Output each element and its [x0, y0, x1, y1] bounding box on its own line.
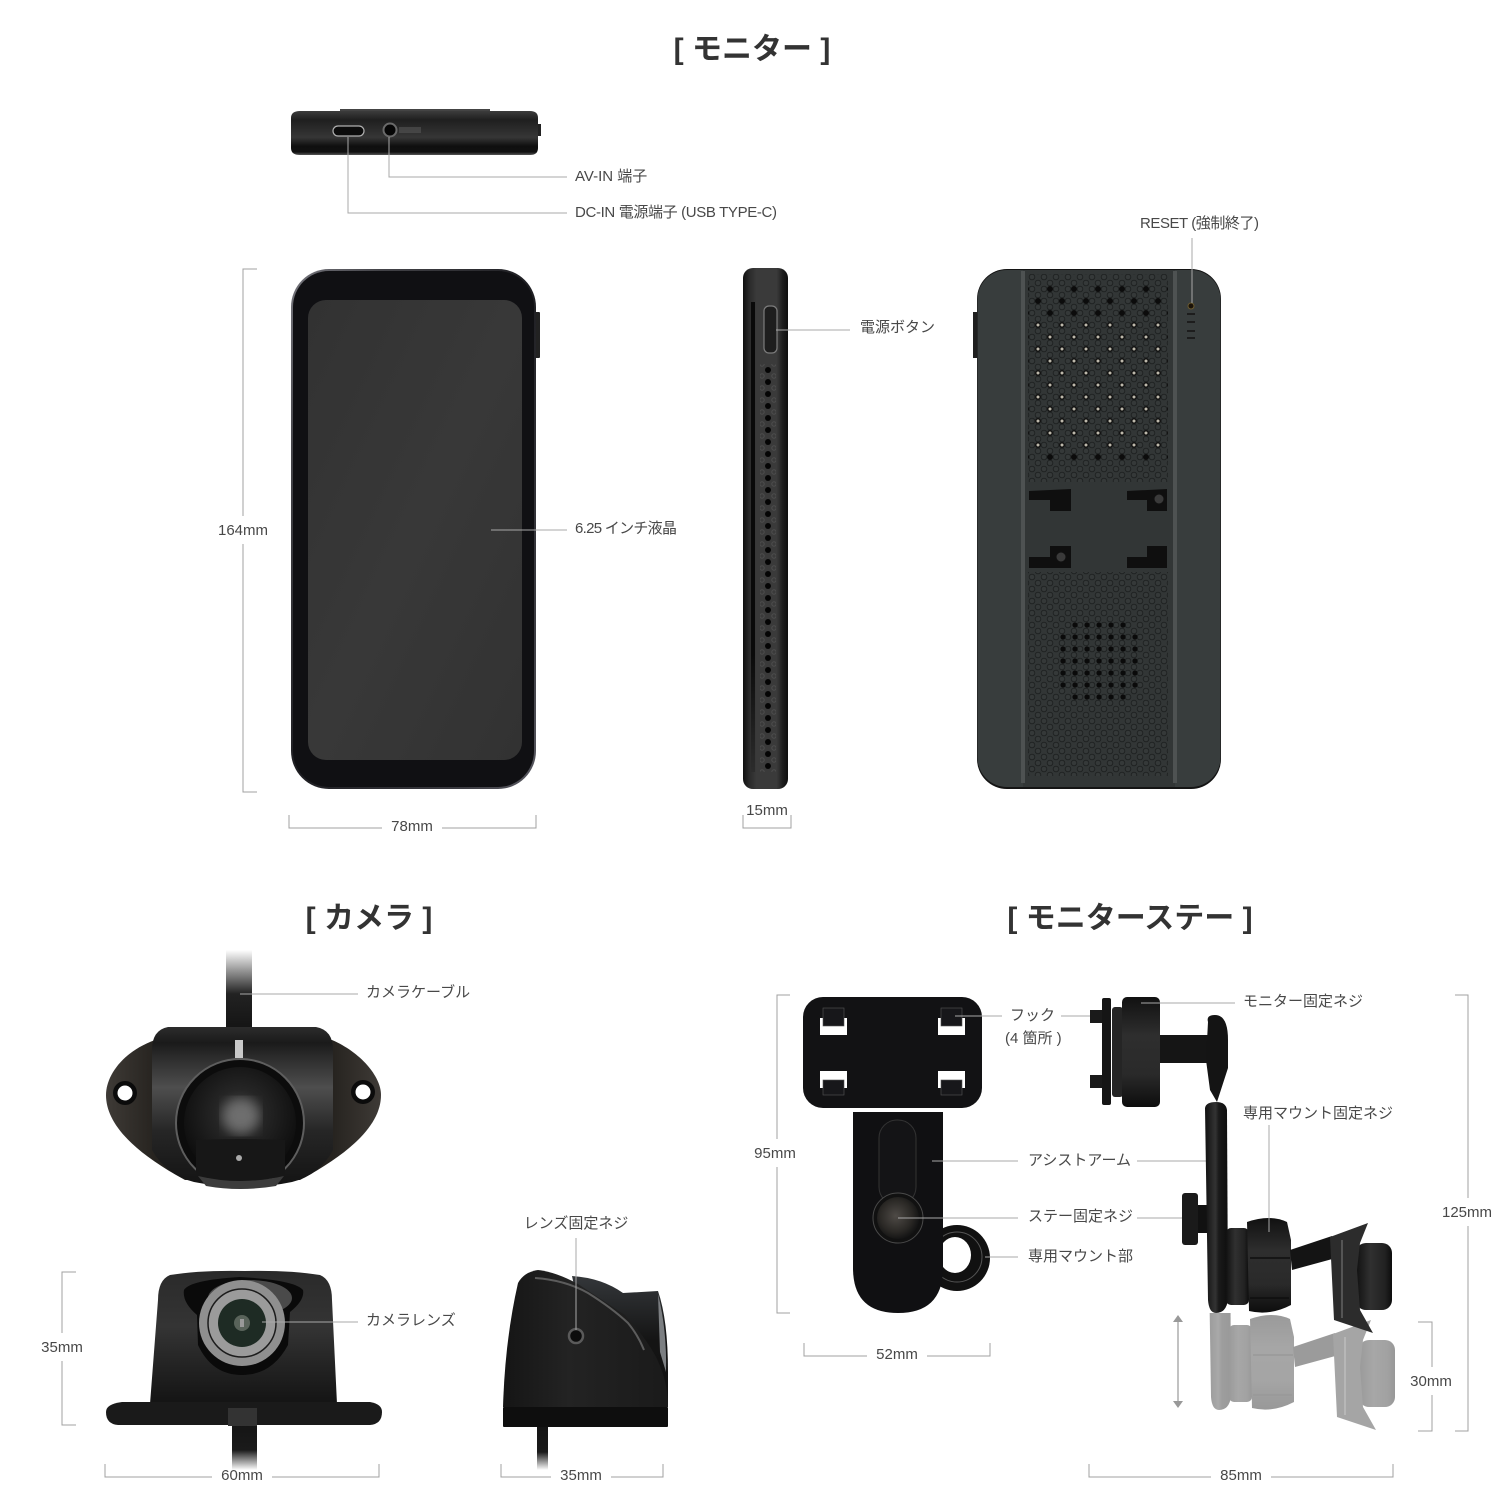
- dimension: 60mm: [105, 1464, 379, 1484]
- dimension: 52mm: [804, 1343, 990, 1363]
- label: camera cable: カメラケーブル: [366, 983, 470, 1001]
- dimension: 35mm width: [501, 1464, 663, 1484]
- leaders: hook right and arm: [898, 1016, 1210, 1257]
- dimension: 35mm height: 35mm: [41, 1339, 83, 1356]
- leader: monitor screw: [1141, 1002, 1235, 1004]
- mounting holes: [113, 1081, 137, 1105]
- stay front view: [803, 997, 990, 1313]
- label: stay screw: ステー固定ネジ: [1028, 1208, 1133, 1225]
- label: assist arm: アシストアーム: [1028, 1152, 1131, 1169]
- camera front view: [106, 1271, 382, 1470]
- dimension: 30mm: [1410, 1322, 1452, 1431]
- ball joint: [176, 1059, 304, 1187]
- dimension: 15mm: 15mm: [746, 802, 788, 819]
- camera side view: [503, 1270, 668, 1470]
- lower speaker grille: [1028, 572, 1168, 776]
- dimension: 30mm: 30mm: [1410, 1373, 1452, 1390]
- upper speaker grille: [1028, 274, 1168, 482]
- monitor side view: [743, 268, 788, 789]
- dimension: 125mm: 125mm: [1442, 1204, 1492, 1221]
- ghost position of lower mount: [1210, 1313, 1395, 1430]
- leader: hook: [955, 1015, 1002, 1017]
- label: lens screw: レンズ固定ネジ: [524, 1215, 628, 1232]
- label: DC-IN: DC-IN 電源端子 (USB TYPE-C): [575, 204, 777, 221]
- lens housing: [572, 1276, 668, 1407]
- label: camera lens: カメラレンズ: [366, 1312, 456, 1329]
- dimension: 60mm: 60mm: [221, 1467, 263, 1484]
- dimension: 78mm: [289, 815, 536, 835]
- hook slots: [820, 1008, 965, 1095]
- label: LCD: 6.25 インチ液晶: [575, 520, 677, 537]
- dimension: 35mm width: 35mm: [560, 1467, 602, 1484]
- leader: camera lens: [262, 1321, 358, 1323]
- icon: lens fixing screw: [569, 1329, 583, 1343]
- leader: AV-IN: [389, 137, 567, 177]
- label: hook: フック: [1010, 1007, 1055, 1024]
- upper head: [1090, 997, 1228, 1107]
- leader: DC-IN: [348, 137, 567, 213]
- power button: [764, 306, 777, 353]
- leader: lens screw: [575, 1238, 577, 1330]
- dimension: 164mm: 164mm: [218, 522, 268, 539]
- leader: reset: [1191, 238, 1193, 303]
- camera top view: [106, 950, 381, 1189]
- mount slots: [1029, 489, 1167, 568]
- dimension: 78mm: 78mm: [391, 818, 433, 835]
- arrow: vertical adjustment: [1173, 1315, 1183, 1408]
- screen: [308, 300, 522, 760]
- label: monitor screw: モニター固定ネジ: [1243, 993, 1363, 1010]
- icon: USB-C port: [333, 126, 364, 136]
- screw: [873, 1193, 923, 1243]
- leader: LCD: [491, 529, 567, 531]
- leader: camera cable: [240, 993, 358, 995]
- icon: AV-IN jack: [384, 124, 396, 136]
- lower mount: [1205, 1102, 1392, 1333]
- monitor bottom-edge view: [291, 109, 541, 155]
- title: camera: [ カメラ ]: [306, 902, 432, 935]
- stay side view: [1090, 997, 1395, 1430]
- label: hook: (4 箇所 ): [1005, 1030, 1062, 1047]
- housing body: [503, 1270, 668, 1407]
- leader: mount screw: [1268, 1125, 1270, 1232]
- label: hook: [1005, 1007, 1062, 1047]
- reset hole: [1188, 303, 1194, 309]
- label: reset: RESET (強制終了): [1140, 215, 1259, 232]
- monitor front view: [291, 269, 540, 789]
- arm: [853, 1112, 943, 1313]
- lens recess: [184, 1277, 303, 1375]
- leader: power button: [776, 329, 850, 331]
- label: power button: 電源ボタン: [860, 319, 935, 336]
- dimension: 52mm: 52mm: [876, 1346, 918, 1363]
- dimension: 125mm: [1442, 995, 1492, 1431]
- dimension: 15mm: [743, 802, 791, 828]
- title: monitor: [ モニター ]: [674, 33, 830, 66]
- title: monitor stay: [ モニターステー ]: [1007, 902, 1253, 935]
- dimension: 95mm: 95mm: [754, 1145, 796, 1162]
- dimension: 35mm height: [41, 1272, 83, 1425]
- lens: [199, 1280, 285, 1366]
- label: mount screw: 専用マウント固定ネジ: [1243, 1105, 1393, 1122]
- port marking: [399, 127, 421, 133]
- dimension: 164mm: [218, 269, 268, 792]
- dimension: 85mm: [1089, 1464, 1393, 1484]
- label: AV-IN: AV-IN 端子: [575, 168, 647, 185]
- monitor rear view: [973, 269, 1221, 789]
- stay screw knob: [1182, 1193, 1207, 1245]
- mount ring: [924, 1225, 990, 1291]
- label: mount section: 専用マウント部: [1028, 1248, 1133, 1265]
- dimension: 95mm: [754, 995, 796, 1313]
- plate: [803, 997, 982, 1108]
- dimension: 85mm: 85mm: [1220, 1467, 1262, 1484]
